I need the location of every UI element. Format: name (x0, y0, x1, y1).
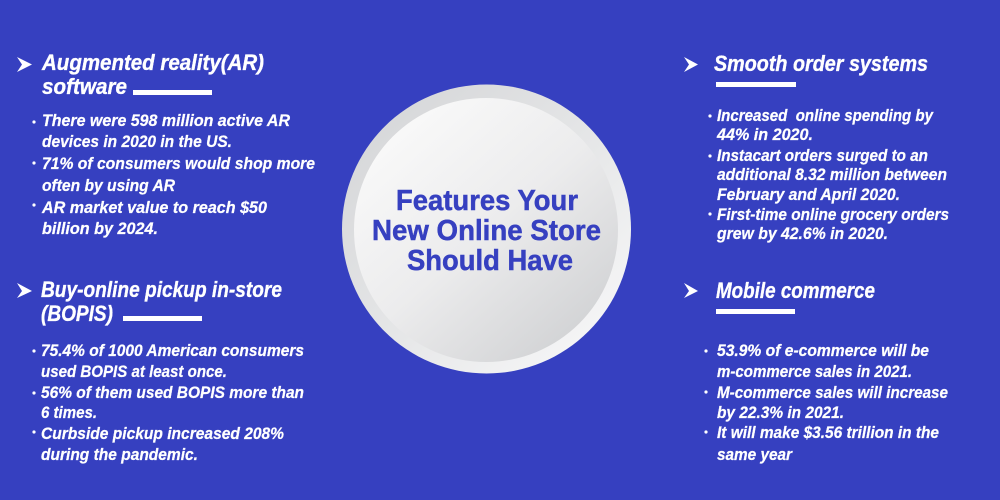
bullet list: 56% of them used BOPIS more than (41, 383, 304, 402)
center circle with title (342, 84, 631, 374)
bullet list: often by using AR (42, 176, 176, 195)
bullet list: billion by 2024. (42, 219, 158, 238)
title: Should Have (407, 245, 573, 277)
bullet list: AR market value to reach $50 (41, 198, 268, 217)
bullet list: additional 8.32 million between (717, 165, 947, 184)
bullet list: There were 598 million active AR (42, 111, 291, 130)
title: Features Your (396, 185, 578, 217)
bullet list: 75.4% of 1000 American consumers (41, 341, 304, 360)
bullet list (32, 111, 315, 238)
icon: arrow (17, 283, 32, 298)
icon: arrow (684, 283, 698, 298)
heading underline (716, 82, 796, 87)
title (372, 185, 601, 277)
heading: augmented reality (41, 50, 264, 99)
bullet list: grew by 42.6% in 2020. (716, 224, 888, 243)
panel: mobile commerce (684, 278, 948, 464)
bullet list: 53.9% of e-commerce will be (717, 341, 929, 360)
bullet list: same year (717, 445, 793, 464)
panel: augmented reality (17, 50, 315, 238)
heading: mobile commerce: Mobile commerce (716, 278, 875, 303)
bullet list: used BOPIS at least once. (41, 362, 227, 381)
icon: arrow (17, 57, 32, 72)
heading underline (133, 90, 212, 95)
heading: BOPIS: (BOPIS) (41, 301, 113, 326)
bullet list (704, 341, 948, 464)
circle inner face (354, 98, 618, 362)
icon: arrow (684, 57, 698, 72)
circle outer rim (342, 84, 631, 374)
heading: augmented reality: software (42, 74, 127, 99)
bullet list: devices in 2020 in the US. (42, 132, 232, 151)
bullet list: 44% in 2020. (716, 125, 813, 144)
bullet list: Increased online spending by (717, 106, 934, 125)
bullet list: m-commerce sales in 2021. (717, 362, 912, 381)
bullet list (708, 106, 949, 243)
heading: BOPIS (41, 277, 282, 326)
bullet list: First-time online grocery orders (717, 205, 949, 224)
heading underline (716, 309, 795, 314)
bullet list: 71% of consumers would shop more (42, 154, 315, 173)
bullet list: February and April 2020. (717, 185, 900, 204)
bullet list: 6 times. (41, 403, 97, 422)
bullet list: Instacart orders surged to an (717, 146, 928, 165)
bullet list: It will make $3.56 trillion in the (717, 423, 939, 442)
bullet list: Curbside pickup increased 208% (41, 424, 284, 443)
panel: smooth order systems (684, 51, 949, 243)
heading: augmented reality: Augmented reality(AR) (41, 50, 264, 75)
bullet list: by 22.3% in 2021. (717, 403, 844, 422)
bullet list (32, 341, 304, 464)
title: New Online Store (372, 215, 601, 247)
heading: smooth order systems: Smooth order systems (714, 51, 928, 76)
heading: BOPIS: Buy-online pickup in-store (41, 277, 282, 302)
bullet list: M-commerce sales will increase (717, 383, 948, 402)
panel: BOPIS (17, 277, 304, 464)
heading underline (123, 316, 202, 321)
bullet list: during the pandemic. (41, 445, 198, 464)
